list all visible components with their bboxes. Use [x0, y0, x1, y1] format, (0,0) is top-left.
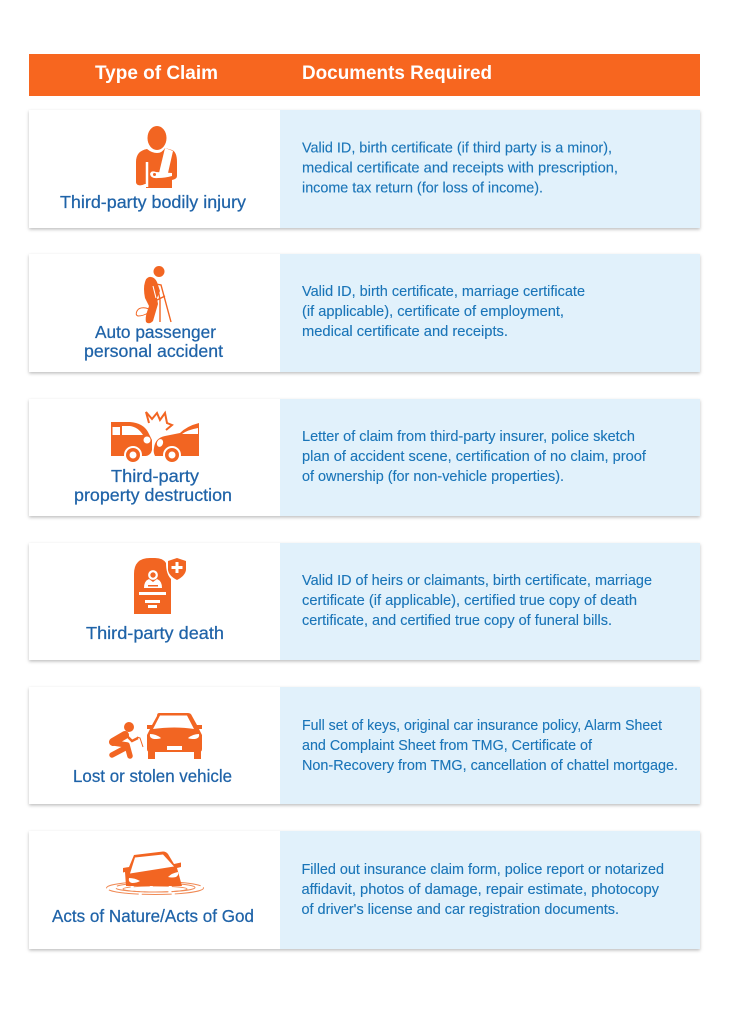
title: Third-party	[111, 466, 199, 486]
documents text: Non-Recovery from TMG, cancellation of chattel mortgage.	[302, 758, 678, 774]
documents text: medical certificate and receipts with prescription,	[302, 160, 618, 176]
documents text: income tax return (for loss of income).	[302, 180, 543, 196]
documents text	[302, 140, 618, 196]
documents text: of ownership (for non-vehicle properties).	[302, 469, 564, 485]
row: acts of nature	[29, 831, 700, 949]
documents text	[302, 862, 664, 918]
icon: person on crutches with leg cast	[136, 266, 171, 323]
documents text	[302, 573, 652, 629]
table header: Documents Required	[302, 63, 492, 84]
documents text: Valid ID of heirs or claimants, birth certificate, marriage	[302, 573, 652, 589]
documents text: medical certificate and receipts.	[302, 324, 508, 340]
icon: two cars colliding	[111, 412, 199, 463]
title: Auto passenger	[95, 322, 216, 342]
row: third-party property destruction	[29, 399, 700, 516]
documents text: plan of accident scene, certification of no claim, proof	[302, 449, 647, 465]
title: Third-party death	[86, 623, 224, 643]
title: personal accident	[84, 341, 223, 361]
title	[74, 466, 232, 505]
row: auto passenger personal accident	[29, 254, 700, 372]
title: property destruction	[74, 485, 232, 505]
row: third-party death	[29, 543, 700, 660]
table header	[29, 54, 700, 96]
documents text	[302, 718, 678, 774]
documents text: Valid ID, birth certificate, marriage certificate	[302, 284, 585, 300]
row: third-party bodily injury	[29, 110, 700, 228]
documents text: Filled out insurance claim form, police report or notarized	[302, 862, 664, 878]
documents text	[302, 284, 585, 340]
table header: Type of Claim	[95, 63, 218, 84]
documents text: certificate, and certified true copy of funeral bills.	[302, 613, 612, 629]
documents text	[302, 429, 647, 485]
documents text: (if applicable), certificate of employment,	[302, 304, 564, 320]
documents text: Full set of keys, original car insurance policy, Alarm Sheet	[302, 718, 662, 734]
icon: thief breaking into car	[112, 713, 202, 759]
documents text: certificate (if applicable), certified true copy of death	[302, 593, 637, 609]
icon: tombstone with shield	[134, 558, 186, 614]
title: Third-party bodily injury	[60, 192, 246, 212]
icon: injured person with arm sling	[136, 126, 177, 188]
title: Lost or stolen vehicle	[73, 766, 232, 786]
documents text: Valid ID, birth certificate (if third party is a minor),	[302, 140, 612, 156]
row: lost or stolen vehicle	[29, 687, 700, 804]
documents text: affidavit, photos of damage, repair estimate, photocopy	[302, 882, 660, 898]
documents text: and Complaint Sheet from TMG, Certificate of	[302, 738, 593, 754]
title	[84, 322, 223, 361]
documents text: Letter of claim from third-party insurer, police sketch	[302, 429, 635, 445]
documents text: of driver's license and car registration documents.	[302, 902, 619, 918]
icon: car flooded in water	[106, 852, 204, 894]
title: Acts of Nature/Acts of God	[52, 906, 254, 926]
